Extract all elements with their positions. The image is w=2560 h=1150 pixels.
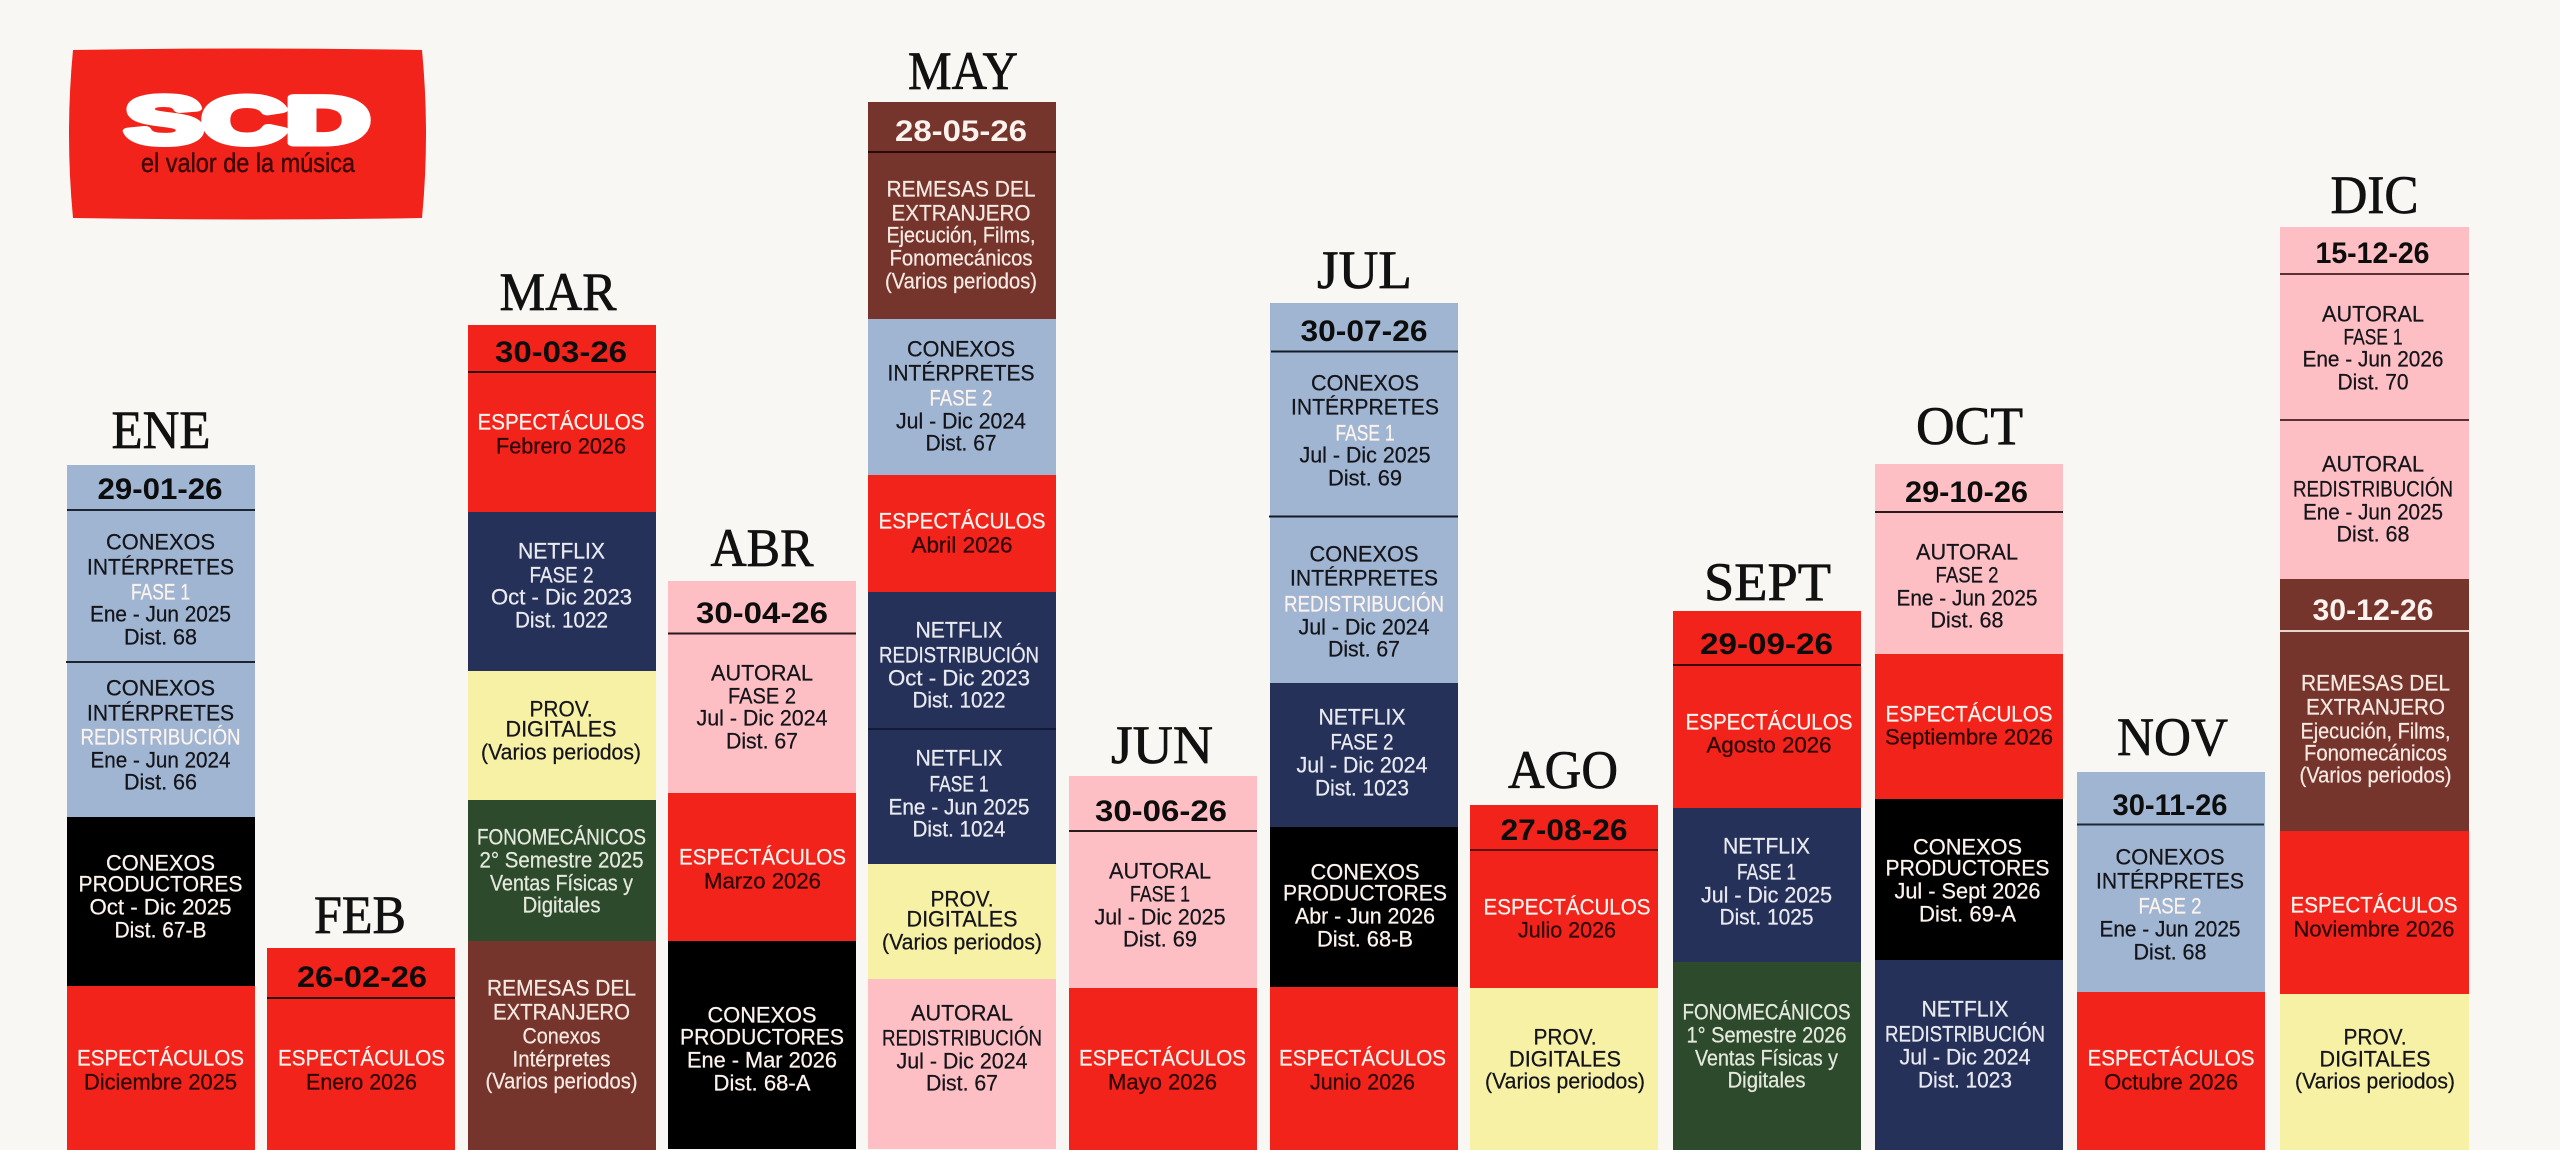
- month title: SEPT: SEPT: [1704, 552, 1831, 612]
- month column: ENE: [66, 400, 255, 1150]
- block: fonomecánicos 2° semestre 2025: 2° Semestre 2025: [480, 848, 644, 873]
- block: netflix fase 1: Dist. 1024: [912, 817, 1006, 842]
- block: conexos productores: Dist. 68-A: [714, 1071, 811, 1096]
- block: netflix redistribución: [868, 592, 1056, 729]
- block: date 30-06-26 and autoral fase 1: FASE 1: [1130, 882, 1190, 907]
- block: netflix fase 1: Dist. 1025: [1720, 905, 1814, 930]
- block: netflix fase 2: NETFLIX: [1318, 705, 1406, 730]
- block: autoral redistribución: AUTORAL: [911, 1001, 1013, 1026]
- block: date 30-03-26 and espectáculos febrero 2026: Febrero 2026: [496, 434, 626, 459]
- block: netflix fase 1: Ene - Jun 2025: [888, 795, 1030, 820]
- block: remesas del extranjero conexos intérpretes: Conexos: [522, 1024, 600, 1049]
- block: date 30-04-26 and autoral fase 2: FASE 2: [728, 684, 796, 709]
- month column: FEB: [267, 885, 455, 1150]
- block: espectáculos mayo 2026: Mayo 2026: [1108, 1070, 1217, 1095]
- block: date 30-12-26 and remesas del extranjero: Ejecución, Films,: [2300, 719, 2450, 744]
- block: conexos intérpretes fase 2: CONEXOS: [907, 337, 1015, 362]
- block: conexos intérpretes redistribución: [66, 661, 255, 817]
- block: autoral redistribución: Dist. 67: [926, 1071, 998, 1096]
- block: date 30-07-26 and conexos intérpretes fase 1: [1270, 303, 1458, 516]
- block: date 15-12-26 and autoral fase 1: Dist. 70: [2338, 370, 2408, 395]
- block: conexos intérpretes fase 2: FASE 2: [930, 386, 992, 411]
- block: prov. digitales: DIGITALES: [506, 717, 616, 742]
- block: espectáculos octubre 2026: ESPECTÁCULOS: [2088, 1046, 2254, 1071]
- block: date 30-11-26 and conexos intérpretes fase 2: CONEXOS: [2116, 845, 2224, 870]
- block: date 30-07-26 and conexos intérpretes fase 1: INTÉRPRETES: [1291, 395, 1439, 420]
- block: remesas del extranjero conexos intérpretes: EXTRANJERO: [493, 1000, 630, 1025]
- block: fonomecánicos 1° semestre 2026: Digitales: [1728, 1068, 1806, 1093]
- block: espectáculos noviembre 2026: [2280, 831, 2469, 994]
- block: date 15-12-26 and autoral fase 1: AUTORAL: [2322, 302, 2424, 327]
- block: netflix fase 1: FASE 1: [930, 772, 988, 797]
- block: prov. digitales: PROV.: [930, 887, 994, 912]
- block: espectáculos marzo 2026: Marzo 2026: [704, 869, 821, 894]
- block: netflix fase 1: Jul - Dic 2025: [1701, 883, 1832, 908]
- block: date 29-10-26 and autoral fase 2: [1875, 464, 2063, 654]
- month column: MAY: [868, 41, 1056, 1149]
- block: date 30-03-26 and espectáculos febrero 2026: ESPECTÁCULOS: [478, 410, 644, 435]
- block: date 27-08-26 and espectáculos julio 2026: Julio 2026: [1518, 918, 1616, 943]
- block: autoral redistribución: Ene - Jun 2025: [2303, 500, 2443, 525]
- block: date 30-06-26 and autoral fase 1: Dist. 69: [1123, 927, 1197, 952]
- block: prov. digitales: (Varios periodos): [882, 930, 1042, 955]
- block: conexos productores: CONEXOS: [1310, 860, 1420, 885]
- block: conexos intérpretes fase 2: Jul - Dic 2024: [896, 409, 1026, 434]
- block: espectáculos abril 2026: Abril 2026: [912, 533, 1012, 558]
- block: espectáculos diciembre 2025: Diciembre 2025: [84, 1070, 237, 1095]
- block: date 29-01-26 and conexos intérpretes fase 1: CONEXOS: [106, 530, 215, 555]
- block: prov. digitales: PROV.: [1534, 1025, 1596, 1050]
- block: date 29-10-26 and autoral fase 2: AUTORAL: [1916, 540, 2018, 565]
- block: espectáculos octubre 2026: [2077, 992, 2265, 1150]
- block: date 28-05-26 and remesas del extranjero: 28-05-26: [895, 115, 1027, 148]
- block: conexos productores: Abr - Jun 2026: [1295, 904, 1435, 929]
- block: date 30-11-26 and conexos intérpretes fase 2: FASE 2: [2138, 894, 2202, 919]
- block: prov. digitales: (Varios periodos): [481, 740, 641, 765]
- block: netflix fase 2: Dist. 1022: [515, 608, 608, 633]
- block: autoral redistribución: [868, 979, 1056, 1149]
- block: espectáculos abril 2026: ESPECTÁCULOS: [878, 509, 1046, 534]
- block: conexos productores: PRODUCTORES: [78, 872, 242, 897]
- month title: FEB: FEB: [314, 885, 406, 945]
- block: fonomecánicos 1° semestre 2026: 1° Semestre 2026: [1686, 1023, 1846, 1048]
- block: conexos productores: [1270, 827, 1458, 987]
- month title: JUN: JUN: [1111, 715, 1213, 775]
- block: date 26-02-26 and espectáculos enero 2026: ESPECTÁCULOS: [278, 1046, 445, 1071]
- block: espectáculos noviembre 2026: ESPECTÁCULOS: [2290, 893, 2458, 918]
- block: conexos intérpretes redistribución: INTÉRPRETES: [87, 701, 234, 726]
- block: remesas del extranjero conexos intérpretes: (Varios periodos): [486, 1069, 638, 1094]
- block: espectáculos junio 2026: Junio 2026: [1310, 1070, 1415, 1095]
- block: date 30-06-26 and autoral fase 1: AUTORAL: [1109, 859, 1211, 884]
- block: netflix fase 2: Jul - Dic 2024: [1296, 753, 1428, 778]
- block: date 29-01-26 and conexos intérpretes fase 1: [67, 465, 255, 662]
- block: conexos intérpretes redistribución: INTÉRPRETES: [1290, 566, 1438, 591]
- block: date 30-12-26 and remesas del extranjero: [2280, 579, 2469, 831]
- block: espectáculos marzo 2026: [668, 793, 856, 941]
- block: conexos intérpretes redistribución: Dist. 67: [1328, 637, 1400, 662]
- block: netflix fase 2: FASE 2: [530, 563, 594, 588]
- month title: OCT: OCT: [1916, 396, 2023, 456]
- block: prov. digitales: DIGITALES: [906, 907, 1018, 932]
- block: date 30-03-26 and espectáculos febrero 2026: 30-03-26: [495, 336, 627, 369]
- block: date 30-04-26 and autoral fase 2: [668, 581, 856, 793]
- block: conexos productores: CONEXOS: [106, 851, 215, 876]
- block: espectáculos diciembre 2025: ESPECTÁCULOS: [77, 1046, 244, 1071]
- block: conexos intérpretes redistribución: Ene - Jun 2024: [90, 748, 230, 773]
- month title: MAR: MAR: [500, 262, 616, 322]
- block: netflix fase 2: [468, 512, 656, 671]
- block: date 30-07-26 and conexos intérpretes fase 1: Jul - Dic 2025: [1300, 443, 1430, 468]
- block: netflix fase 2: FASE 2: [1330, 730, 1394, 755]
- block: prov. digitales: PROV.: [530, 697, 592, 722]
- logo: SCD el valor de la música: el valor de la música: [141, 148, 356, 178]
- block: prov. digitales: DIGITALES: [1509, 1047, 1621, 1072]
- block: date 29-01-26 and conexos intérpretes fase 1: Ene - Jun 2025: [90, 602, 231, 627]
- block: date 30-12-26 and remesas del extranjero: REMESAS DEL: [2301, 671, 2450, 696]
- block: prov. digitales: DIGITALES: [2320, 1047, 2430, 1072]
- block: date 30-06-26 and autoral fase 1: Jul - Dic 2025: [1094, 905, 1226, 930]
- month column: JUN: [1069, 715, 1257, 1150]
- block: conexos productores: Jul - Sept 2026: [1894, 879, 2040, 904]
- block: date 28-05-26 and remesas del extranjero: REMESAS DEL: [886, 177, 1036, 202]
- block: date 27-08-26 and espectáculos julio 2026: [1470, 805, 1658, 988]
- block: date 30-12-26 and remesas del extranjero: 30-12-26: [2312, 594, 2434, 627]
- block: netflix fase 1: [868, 728, 1056, 864]
- block: netflix fase 1: NETFLIX: [916, 746, 1003, 771]
- block: autoral redistribución: REDISTRIBUCIÓN: [2293, 477, 2453, 502]
- month title: ENE: ENE: [112, 400, 210, 460]
- block: netflix fase 2: Dist. 1023: [1315, 776, 1409, 801]
- block: date 30-07-26 and conexos intérpretes fase 1: CONEXOS: [1311, 371, 1419, 396]
- block: prov. digitales: PROV.: [2344, 1025, 2406, 1050]
- block: netflix fase 2: NETFLIX: [518, 539, 605, 564]
- block: espectáculos marzo 2026: ESPECTÁCULOS: [679, 845, 846, 870]
- block: conexos productores: Dist. 69-A: [1919, 902, 2016, 927]
- block: netflix fase 2: [1270, 683, 1458, 827]
- block: espectáculos mayo 2026: ESPECTÁCULOS: [1079, 1046, 1246, 1071]
- block: date 29-01-26 and conexos intérpretes fase 1: 29-01-26: [98, 473, 222, 506]
- block: espectáculos abril 2026: [868, 475, 1056, 592]
- block: date 30-04-26 and autoral fase 2: 30-04-26: [696, 597, 828, 630]
- block: conexos intérpretes redistribución: REDISTRIBUCIÓN: [80, 725, 240, 750]
- block: remesas del extranjero conexos intérpretes: Intérpretes: [512, 1047, 610, 1072]
- block: conexos productores: PRODUCTORES: [1886, 856, 2050, 881]
- block: date 15-12-26 and autoral fase 1: [2280, 227, 2469, 420]
- block: remesas del extranjero conexos intérpretes: [468, 941, 656, 1150]
- logo: SCD el valor de la música: SCD: [126, 83, 370, 157]
- block: conexos intérpretes fase 2: [868, 319, 1056, 475]
- block: netflix fase 1: NETFLIX: [1723, 834, 1810, 859]
- block: netflix redistribución: Dist. 1023: [1918, 1068, 2012, 1093]
- block: netflix fase 1: FASE 1: [1737, 860, 1796, 885]
- block: espectáculos septiembre 2026: [1875, 654, 2063, 799]
- block: espectáculos diciembre 2025: [67, 986, 255, 1150]
- block: date 29-09-26 and espectáculos agosto 2026: Agosto 2026: [1706, 733, 1832, 758]
- block: autoral redistribución: AUTORAL: [2322, 452, 2424, 477]
- block: date 26-02-26 and espectáculos enero 2026: [267, 948, 455, 1150]
- block: conexos intérpretes redistribución: Dist. 66: [124, 770, 197, 795]
- block: date 15-12-26 and autoral fase 1: FASE 1: [2344, 325, 2402, 350]
- block: conexos productores: [668, 941, 856, 1149]
- block: conexos productores: Dist. 67-B: [114, 918, 206, 943]
- block: date 29-01-26 and conexos intérpretes fase 1: Dist. 68: [124, 625, 197, 650]
- month title: DIC: DIC: [2330, 165, 2418, 225]
- block: date 30-07-26 and conexos intérpretes fase 1: FASE 1: [1336, 421, 1394, 446]
- block: netflix redistribución: NETFLIX: [1922, 997, 2009, 1022]
- block: conexos intérpretes fase 2: INTÉRPRETES: [888, 361, 1034, 386]
- block: conexos productores: [1875, 799, 2063, 960]
- block: autoral redistribución: REDISTRIBUCIÓN: [882, 1026, 1042, 1051]
- block: date 30-04-26 and autoral fase 2: AUTORAL: [711, 661, 813, 686]
- block: date 26-02-26 and espectáculos enero 2026: Enero 2026: [306, 1070, 417, 1095]
- block: netflix fase 2: Oct - Dic 2023: [491, 585, 632, 610]
- block: prov. digitales: [868, 864, 1056, 979]
- block: date 30-07-26 and conexos intérpretes fase 1: Dist. 69: [1328, 466, 1402, 491]
- block: autoral redistribución: Jul - Dic 2024: [896, 1049, 1028, 1074]
- block: date 28-05-26 and remesas del extranjero: Ejecución, Films,: [886, 223, 1036, 248]
- block: conexos intérpretes redistribución: REDISTRIBUCIÓN: [1284, 592, 1444, 617]
- block: espectáculos junio 2026: [1270, 987, 1458, 1150]
- block: autoral redistribución: [2280, 419, 2469, 579]
- block: remesas del extranjero conexos intérpretes: REMESAS DEL: [487, 976, 636, 1001]
- block: date 29-09-26 and espectáculos agosto 2026: 29-09-26: [1700, 628, 1833, 661]
- block: date 26-02-26 and espectáculos enero 2026: 26-02-26: [297, 961, 427, 994]
- block: conexos productores: CONEXOS: [1913, 835, 2022, 860]
- block: prov. digitales: (Varios periodos): [1485, 1069, 1645, 1094]
- block: date 28-05-26 and remesas del extranjero: EXTRANJERO: [892, 201, 1030, 226]
- block: conexos productores: PRODUCTORES: [680, 1025, 844, 1050]
- block: conexos productores: Oct - Dic 2025: [90, 895, 232, 920]
- month title: NOV: NOV: [2117, 707, 2228, 767]
- block: netflix redistribución: REDISTRIBUCIÓN: [879, 643, 1039, 668]
- block: date 29-10-26 and autoral fase 2: 29-10-26: [1905, 476, 2028, 509]
- month column: MAR: [468, 262, 656, 1150]
- block: prov. digitales: [1470, 988, 1658, 1150]
- block: prov. digitales: (Varios periodos): [2295, 1069, 2455, 1094]
- block: conexos productores: CONEXOS: [708, 1003, 816, 1028]
- block: espectáculos septiembre 2026: ESPECTÁCULOS: [1886, 702, 2052, 727]
- block: date 15-12-26 and autoral fase 1: 15-12-26: [2316, 237, 2430, 270]
- month title: MAY: MAY: [908, 41, 1018, 101]
- block: date 30-06-26 and autoral fase 1: 30-06-26: [1095, 795, 1227, 828]
- month title: AGO: AGO: [1508, 740, 1618, 800]
- block: conexos productores: Ene - Mar 2026: [687, 1048, 837, 1073]
- logo: SCD el valor de la música: [69, 48, 426, 220]
- month title: JUL: JUL: [1317, 240, 1412, 300]
- block: netflix redistribución: REDISTRIBUCIÓN: [1885, 1022, 2045, 1047]
- block: netflix fase 1: [1673, 808, 1861, 962]
- block: netflix redistribución: Jul - Dic 2024: [1900, 1045, 2030, 1070]
- block: date 29-01-26 and conexos intérpretes fase 1: FASE 1: [131, 580, 190, 605]
- block: date 28-05-26 and remesas del extranjero: Fonomecánicos: [890, 246, 1032, 271]
- month column: ABR: [668, 518, 856, 1149]
- block: netflix redistribución: Oct - Dic 2023: [888, 666, 1030, 691]
- block: date 29-09-26 and espectáculos agosto 2026: ESPECTÁCULOS: [1686, 710, 1852, 735]
- block: conexos intérpretes redistribución: CONEXOS: [106, 676, 215, 701]
- block: date 30-12-26 and remesas del extranjero: Fonomecánicos: [2304, 741, 2447, 766]
- block: fonomecánicos 2° semestre 2025: FONOMECÁNICOS: [477, 825, 646, 850]
- block: date 30-11-26 and conexos intérpretes fase 2: Ene - Jun 2025: [2100, 917, 2240, 942]
- block: conexos intérpretes redistribución: CONEXOS: [1310, 542, 1418, 567]
- block: date 27-08-26 and espectáculos julio 2026: 27-08-26: [1500, 814, 1628, 847]
- month column: JUL: [1269, 240, 1458, 1150]
- block: espectáculos noviembre 2026: Noviembre 2026: [2294, 917, 2454, 942]
- block: prov. digitales: [2280, 994, 2469, 1150]
- block: date 15-12-26 and autoral fase 1: Ene - Jun 2026: [2302, 347, 2444, 372]
- month column: NOV: [2077, 707, 2265, 1150]
- block: date 27-08-26 and espectáculos julio 2026: ESPECTÁCULOS: [1484, 895, 1650, 920]
- block: espectáculos octubre 2026: Octubre 2026: [2104, 1070, 2238, 1095]
- block: netflix redistribución: Dist. 1022: [912, 688, 1006, 713]
- block: espectáculos mayo 2026: [1069, 988, 1257, 1150]
- month title: ABR: ABR: [710, 518, 814, 578]
- block: netflix redistribución: [1875, 960, 2063, 1150]
- block: date 30-03-26 and espectáculos febrero 2026: [468, 325, 656, 513]
- block: conexos intérpretes redistribución: Jul - Dic 2024: [1298, 615, 1430, 640]
- block: date 30-12-26 and remesas del extranjero: EXTRANJERO: [2306, 695, 2445, 720]
- block: date 29-10-26 and autoral fase 2: Ene - Jun 2025: [1896, 586, 2038, 611]
- block: date 30-06-26 and autoral fase 1: [1069, 776, 1257, 988]
- block: date 28-05-26 and remesas del extranjero: [868, 102, 1056, 319]
- block: date 30-04-26 and autoral fase 2: Jul - Dic 2024: [696, 706, 828, 731]
- block: netflix redistribución: NETFLIX: [916, 618, 1003, 643]
- block: fonomecánicos 2° semestre 2025: Ventas Físicas y: [490, 871, 633, 896]
- block: conexos productores: PRODUCTORES: [1283, 881, 1447, 906]
- month column: OCT: [1875, 396, 2063, 1150]
- block: prov. digitales: [468, 671, 656, 801]
- block: conexos intérpretes fase 2: Dist. 67: [926, 431, 996, 456]
- block: fonomecánicos 2° semestre 2025: [468, 800, 656, 942]
- block: conexos intérpretes redistribución: [1269, 516, 1458, 683]
- block: date 29-01-26 and conexos intérpretes fase 1: INTÉRPRETES: [87, 555, 234, 580]
- block: fonomecánicos 1° semestre 2026: FONOMECÁNICOS: [1682, 1000, 1850, 1025]
- block: autoral redistribución: Dist. 68: [2336, 522, 2410, 547]
- block: conexos productores: [67, 817, 255, 986]
- block: fonomecánicos 1° semestre 2026: [1673, 962, 1861, 1150]
- block: date 30-07-26 and conexos intérpretes fase 1: 30-07-26: [1300, 315, 1428, 348]
- block: date 28-05-26 and remesas del extranjero: (Varios periodos): [885, 269, 1037, 294]
- block: date 30-11-26 and conexos intérpretes fase 2: [2077, 772, 2265, 992]
- block: espectáculos septiembre 2026: Septiembre 2026: [1885, 725, 2053, 750]
- block: date 30-04-26 and autoral fase 2: Dist. 67: [726, 729, 798, 754]
- block: fonomecánicos 2° semestre 2025: Digitales: [522, 893, 600, 918]
- block: date 29-10-26 and autoral fase 2: FASE 2: [1936, 563, 1998, 588]
- block: date 30-11-26 and conexos intérpretes fase 2: INTÉRPRETES: [2096, 869, 2244, 894]
- month column: DIC: [2280, 165, 2469, 1150]
- block: conexos productores: Dist. 68-B: [1317, 927, 1413, 952]
- block: fonomecánicos 1° semestre 2026: Ventas Físicas y: [1695, 1046, 1838, 1071]
- block: date 30-12-26 and remesas del extranjero: (Varios periodos): [2300, 763, 2452, 788]
- block: date 30-11-26 and conexos intérpretes fase 2: Dist. 68: [2134, 940, 2206, 965]
- block: date 29-10-26 and autoral fase 2: Dist. 68: [1930, 608, 2004, 633]
- block: date 30-11-26 and conexos intérpretes fase 2: 30-11-26: [2112, 789, 2228, 822]
- block: date 29-09-26 and espectáculos agosto 2026: [1673, 611, 1861, 808]
- month column: AGO: [1470, 740, 1658, 1150]
- month column: SEPT: [1673, 552, 1861, 1150]
- block: espectáculos junio 2026: ESPECTÁCULOS: [1279, 1046, 1446, 1071]
